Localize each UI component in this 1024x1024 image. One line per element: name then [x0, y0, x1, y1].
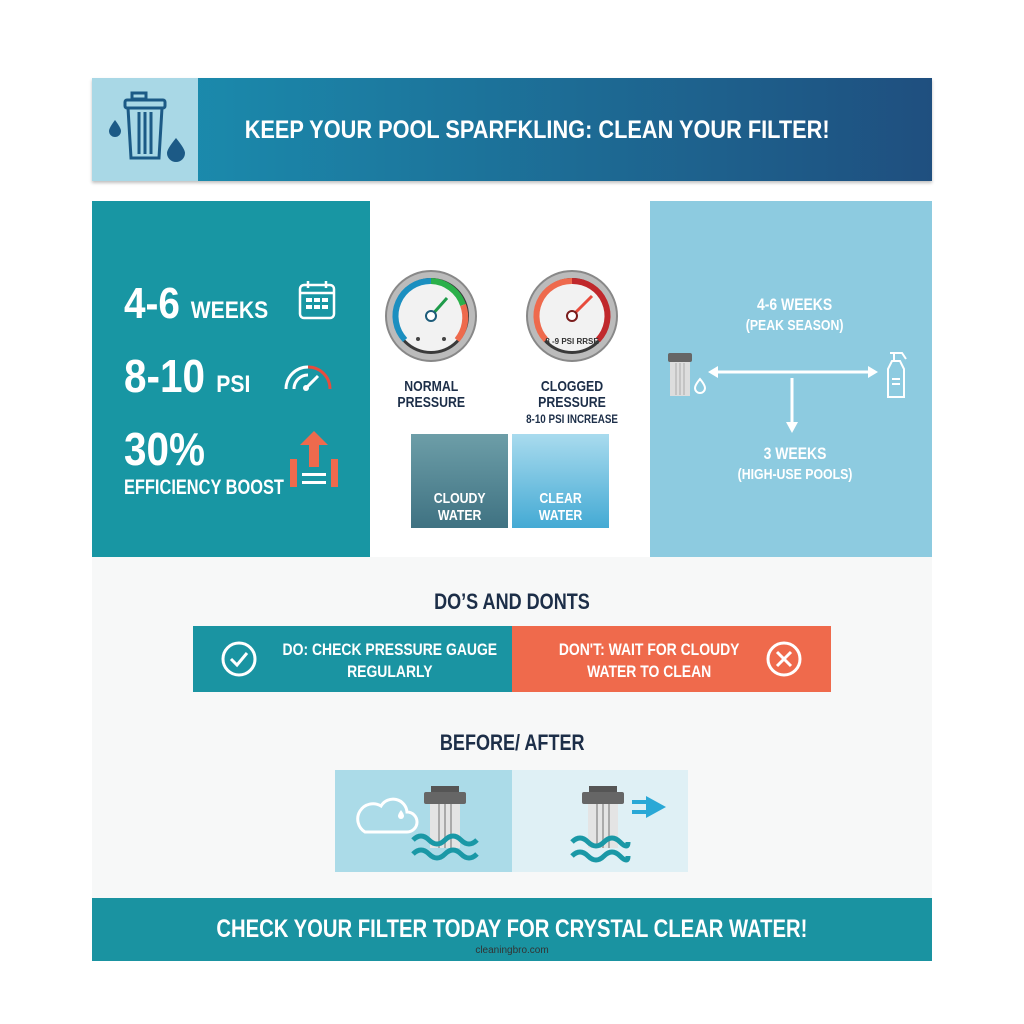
- box: dont: DON'T: WAIT FOR CLOUDY: [559, 640, 740, 659]
- header banner: [92, 78, 932, 181]
- icon: trash can with drops: [92, 78, 198, 181]
- icon: boost arrow: [290, 431, 338, 487]
- title: KEEP YOUR POOL SPARFKLING: CLEAN YOUR FILTER!: [245, 116, 829, 144]
- credit: cleaningbro.com: [475, 945, 549, 956]
- tile: cloudy water: CLOUDY: [434, 490, 485, 507]
- label clogged: 8-10 PSI INCREASE: [526, 412, 618, 426]
- text high use: [738, 444, 852, 483]
- icon: check: [222, 642, 256, 676]
- box: dont: [512, 626, 831, 692]
- tile: cloudy water: [411, 434, 508, 528]
- panel: schedule: [650, 201, 932, 557]
- stat efficiency: 30%: [124, 423, 205, 475]
- arrow: horizontal double: [708, 366, 878, 378]
- label clogged: PRESSURE: [538, 394, 606, 411]
- icon: calendar: [298, 281, 336, 320]
- footer banner: [92, 898, 932, 961]
- stat weeks: 4-6 WEEKS: [124, 279, 268, 328]
- footer banner: CHECK YOUR FILTER TODAY FOR CRYSTAL CLEAR WATER!: [216, 915, 808, 943]
- label clogged: [526, 378, 618, 426]
- text high use: (HIGH-USE POOLS): [738, 466, 852, 483]
- icon: filter: [668, 353, 706, 396]
- tile: cloudy water: WATER: [438, 507, 481, 524]
- text peak season: 4-6 WEEKS: [757, 295, 833, 314]
- gauge: clogged: 8 -9 PSI RRSE: [545, 337, 599, 346]
- heading: dos and donts: DO’S AND DONTS: [434, 589, 590, 614]
- box: do: [193, 626, 512, 692]
- section background: [92, 557, 932, 898]
- icon: gauge: [284, 366, 332, 391]
- text peak season: (PEAK SEASON): [746, 317, 844, 334]
- panel: after: [512, 770, 688, 872]
- panel: stats: EFFICIENCY BOOST: [124, 476, 284, 499]
- label normal: NORMAL: [404, 378, 458, 395]
- icon: x: [766, 642, 802, 676]
- label normal: PRESSURE: [397, 394, 465, 411]
- stat psi: 8-10 PSI: [124, 350, 250, 402]
- tile: clear water: [512, 434, 609, 528]
- tile: clear water: CLEAR: [539, 490, 582, 507]
- gauge: normal: [385, 270, 477, 362]
- arrow: down: [786, 378, 798, 433]
- box: dont: WATER TO CLEAN: [587, 662, 712, 681]
- heading: before after: BEFORE/ AFTER: [440, 730, 584, 755]
- panel: before: [335, 770, 512, 872]
- icon: spray bottle: [887, 352, 907, 398]
- text peak season: [746, 295, 844, 334]
- tile: clear water: WATER: [539, 507, 582, 524]
- label clogged: CLOGGED: [541, 378, 603, 395]
- label normal: [397, 378, 465, 411]
- text high use: 3 WEEKS: [764, 444, 826, 463]
- panel: stats: [92, 201, 370, 557]
- box: do: REGULARLY: [347, 662, 433, 681]
- gauge: clogged: [526, 270, 618, 362]
- box: do: DO: CHECK PRESSURE GAUGE: [283, 640, 497, 659]
